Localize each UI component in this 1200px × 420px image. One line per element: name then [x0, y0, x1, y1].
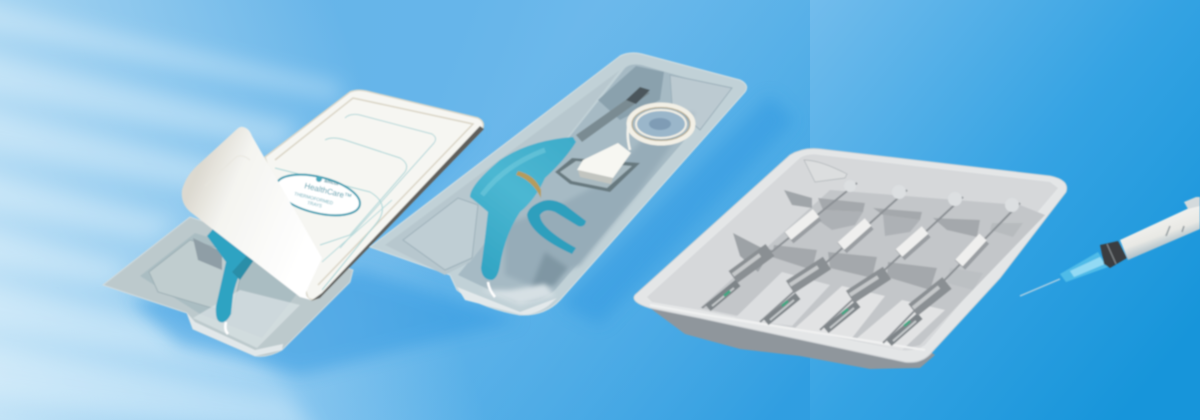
syringe 2 [760, 185, 907, 322]
left tray with peeled lid [103, 90, 484, 356]
teal handheld device [470, 137, 586, 297]
lid logo and label: THERMOFORMED [294, 191, 334, 206]
middle tray with instrument [370, 53, 747, 315]
syringe 3 [820, 192, 963, 330]
syringe 1 [702, 180, 857, 308]
lid logo and label: TRAYS [307, 200, 323, 209]
lid logo and label: HealthCare™ [304, 181, 353, 202]
right tray with four syringes [634, 149, 1067, 369]
coil of cable [628, 105, 693, 150]
rubber seal [1100, 241, 1127, 268]
syringe 4 [883, 198, 1020, 343]
peeled lid flap [182, 127, 322, 300]
connector cradle and plug [555, 143, 640, 192]
teal handle in left tray [207, 229, 254, 334]
needle hub [1060, 252, 1108, 282]
left tray body [103, 217, 353, 356]
sealed lid [265, 90, 484, 301]
syringe at right edge [1020, 197, 1200, 296]
middle tray body [370, 53, 747, 315]
right tray body [634, 149, 1067, 369]
divider blocks [733, 190, 1023, 290]
barrel [1120, 203, 1200, 260]
lid logo and label: amcor [324, 178, 340, 188]
needle [1020, 279, 1060, 296]
instrument shaft [576, 87, 650, 142]
lid logo and label [272, 167, 364, 223]
